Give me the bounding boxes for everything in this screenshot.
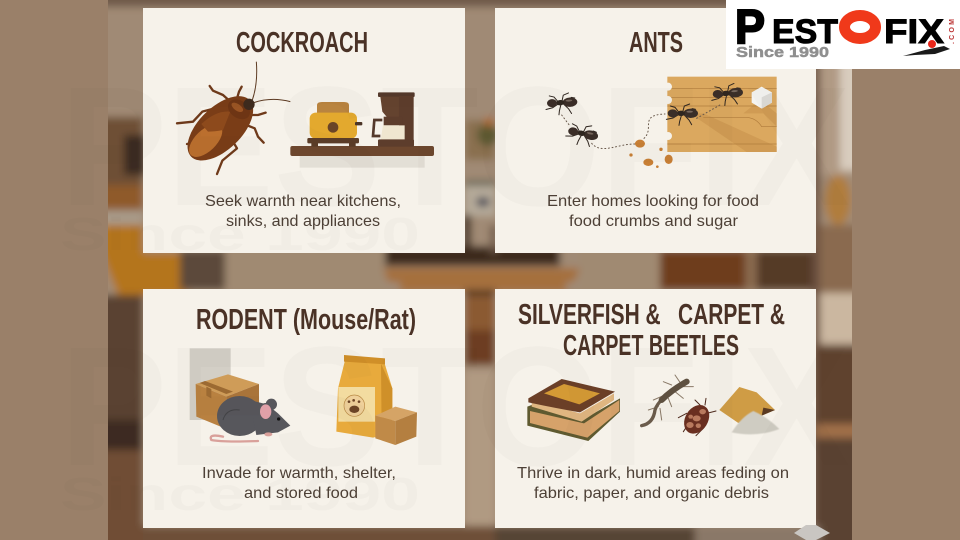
heading: RODENT (Mouse/Rat) xyxy=(196,304,416,336)
card background xyxy=(495,8,816,253)
heading: COCKROACH xyxy=(236,27,368,59)
icon: stacked books xyxy=(527,379,620,441)
logo wordmark: FIX xyxy=(884,13,944,51)
logo wordmark: EST xyxy=(772,13,838,51)
logo: Pestofix xyxy=(726,0,960,69)
description: Invade for warmth, shelter, xyxy=(202,465,396,482)
icon: silverfish xyxy=(642,375,693,426)
logo tagline: Since 1990 xyxy=(736,44,829,61)
icon: pet food bag and box xyxy=(336,355,417,445)
panel: ants xyxy=(495,8,816,253)
icon: cockroach xyxy=(176,62,290,174)
panel: cockroach xyxy=(143,8,465,253)
logo bug xyxy=(903,40,950,56)
icon: toaster and coffee maker on shelf xyxy=(290,92,434,168)
icon: ants on wooden board xyxy=(545,77,777,168)
card background xyxy=(495,289,816,528)
logo wordmark: P xyxy=(735,1,765,54)
heading: ANTS xyxy=(629,27,683,59)
corner sparkle xyxy=(794,525,830,540)
logo domain: .COM xyxy=(949,19,956,44)
description line 2: sinks, and appliances xyxy=(226,213,380,230)
logo letter O xyxy=(844,16,876,38)
logo wordmark xyxy=(735,1,944,54)
background: blurred living room xyxy=(108,0,852,540)
description line 2: and stored food xyxy=(244,485,358,502)
heading: SILVERFISH & CARPET & xyxy=(518,299,785,331)
icon: mouse and cardboard box xyxy=(190,348,290,441)
panel: silverfish and carpet beetles xyxy=(495,289,816,528)
description: Seek warnth near kitchens, xyxy=(205,193,401,210)
panel: rodent xyxy=(143,289,465,528)
card background xyxy=(143,289,465,528)
description: Thrive in dark, humid areas feding on xyxy=(517,465,789,482)
icon: carpet beetle xyxy=(678,398,716,438)
heading line 2: CARPET BEETLES xyxy=(563,330,739,362)
description line 2: fabric, paper, and organic debris xyxy=(534,485,769,502)
description line 2: food crumbs and sugar xyxy=(569,213,739,230)
description: Enter homes looking for food xyxy=(547,193,759,210)
card background xyxy=(143,8,465,253)
icon: fabric and powder pile xyxy=(719,387,779,434)
